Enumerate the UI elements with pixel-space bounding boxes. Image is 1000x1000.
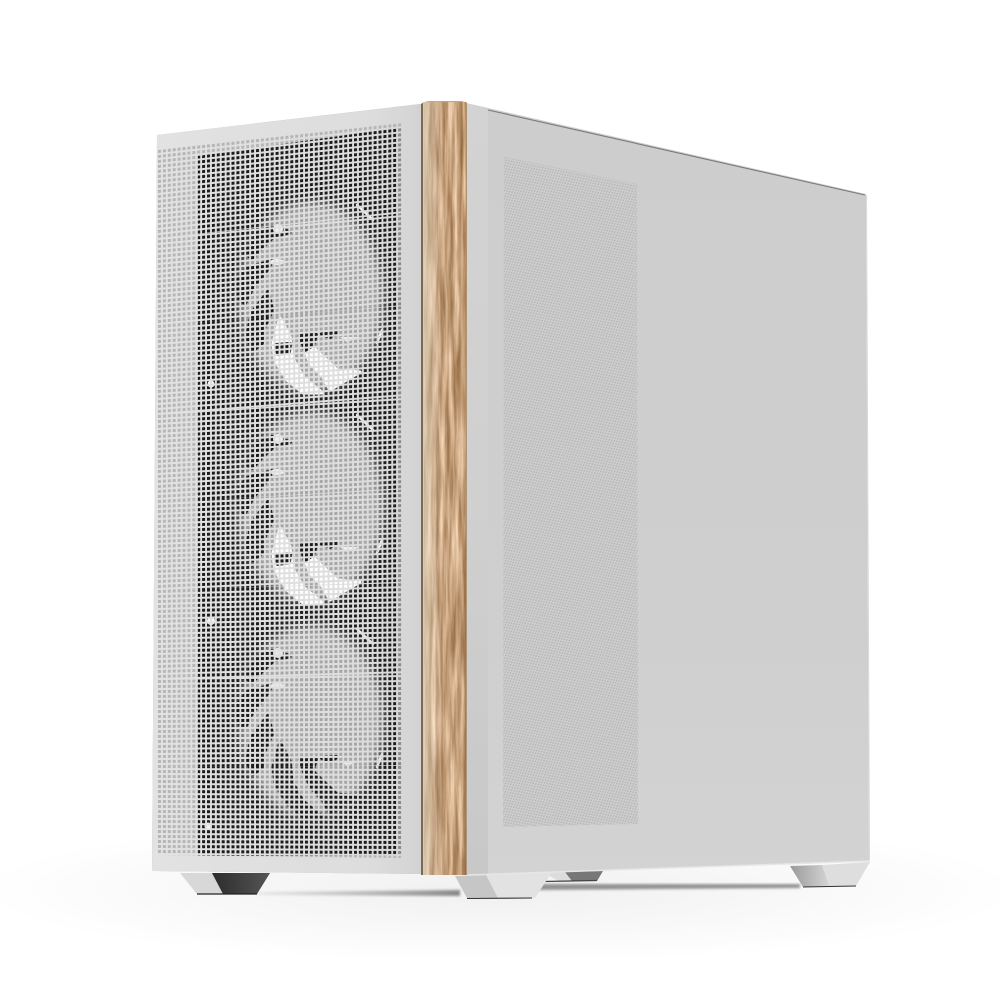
panel: side [466,103,870,875]
wood trim [421,101,467,875]
wood texture [424,102,466,875]
side panel top edge [488,110,865,195]
dark interior frame [198,128,396,856]
foot: back middle [543,871,603,882]
wood highlight [423,102,467,875]
side panel surface [466,103,869,875]
contact shadow under case [258,884,800,896]
front panel perforated plate [152,104,421,874]
side panel right edge [866,195,870,860]
fan 1 [235,202,383,393]
foot: front middle [455,872,552,898]
panel: front mesh [152,104,421,874]
foot: front left [180,873,270,894]
wood grain base [423,101,466,875]
product illustration: PC case [152,101,870,926]
wood shadow seam [421,102,424,875]
fan 2 [235,412,383,603]
interior right rail [396,126,405,856]
foot: back right [790,862,870,887]
floor shadow [0,818,1000,962]
LED dots [204,380,215,830]
side panel front strip [466,103,488,875]
side panel lower lip [468,861,870,875]
interior behind mesh [152,104,420,874]
fan 3 [235,626,383,817]
side ventilation mesh [503,157,638,827]
